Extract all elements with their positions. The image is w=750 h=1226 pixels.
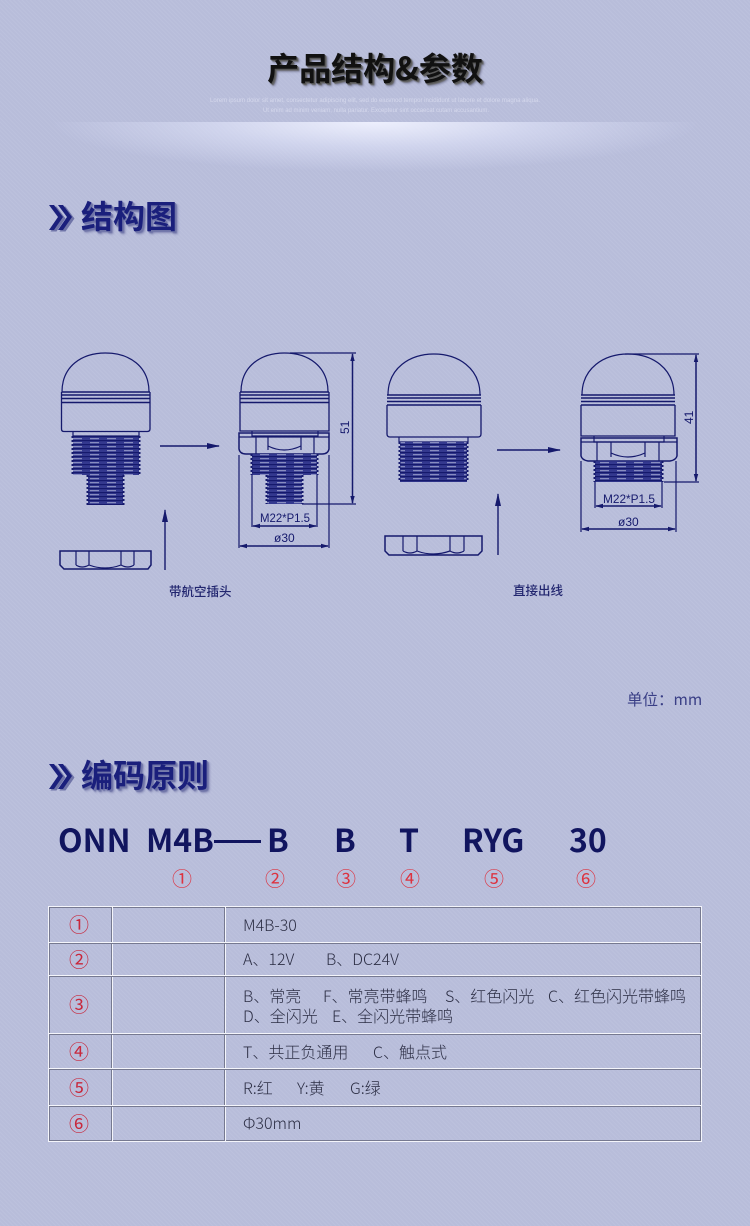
row 1 xyxy=(69,909,297,938)
model code line: B xyxy=(267,816,289,862)
dimension labels: ø30 xyxy=(274,531,295,545)
row 2: A、12V xyxy=(243,946,294,970)
model code line: ④ xyxy=(400,863,420,892)
model code line: ① xyxy=(172,863,192,892)
row 3: F、常亮带蜂鸣 xyxy=(323,983,428,1007)
row 4: ④ xyxy=(69,1036,89,1065)
icon: double chevron xyxy=(49,205,74,232)
row 4: C、触点式 xyxy=(373,1039,447,1063)
heading text: 编码原则 xyxy=(81,751,209,797)
row 4 xyxy=(69,1036,447,1065)
caption: aviation plug: 带航空插头 xyxy=(169,581,232,600)
row 5: R:红 xyxy=(243,1075,273,1099)
model code line: ⑥ xyxy=(576,863,596,892)
dimension labels: M22*P1.5 xyxy=(603,492,655,506)
subtitle placeholder text: Ut enim ad minim veniam, nulla pariatur. Excepteur sint occaecat cutam accusantium. xyxy=(263,107,489,114)
unit note: 单位：mm xyxy=(627,688,702,710)
row 5 xyxy=(69,1072,381,1101)
section heading: coding rules xyxy=(49,751,211,797)
drawing: assembled lamp with direct wiring, dimensions xyxy=(581,354,699,532)
coding table xyxy=(48,906,702,1142)
row 3: C、红色闪光带蜂鸣 xyxy=(548,983,686,1007)
row 2: ② xyxy=(69,944,89,973)
row 6: Φ30mm xyxy=(243,1110,301,1134)
model code line: ONN xyxy=(58,816,131,862)
subtitle placeholder text xyxy=(210,97,540,114)
dimension labels: ø30 xyxy=(618,515,639,529)
row 5: Y:黄 xyxy=(297,1075,325,1099)
model code line: ② xyxy=(265,863,285,892)
row 6: ⑥ xyxy=(69,1108,89,1137)
model code line: RYG xyxy=(462,816,524,862)
row 3: S、红色闪光 xyxy=(445,983,534,1007)
row 5: ⑤ xyxy=(69,1072,89,1101)
row 3: E、全闪光带蜂鸣 xyxy=(332,1003,453,1027)
model code line: ⑤ xyxy=(484,863,504,892)
model code line: B xyxy=(334,816,356,862)
model code line xyxy=(58,816,607,892)
icon: double chevron xyxy=(49,764,74,790)
row 2 xyxy=(69,944,399,973)
caption: direct wiring: 直接出线 xyxy=(513,580,563,599)
row 1: M4B-30 xyxy=(243,912,297,936)
row 2: B、DC24V xyxy=(326,946,399,970)
model code line: ③ xyxy=(336,863,356,892)
heading text: 结构图 xyxy=(81,192,177,238)
drawing: lamp with direct wiring xyxy=(385,354,482,555)
section heading: structure diagram xyxy=(49,192,179,238)
row 1: ① xyxy=(69,909,89,938)
row 3: ③ xyxy=(69,989,89,1018)
drawing: lamp with aviation plug xyxy=(60,353,151,569)
arrows: direct wiring assembly xyxy=(497,450,560,555)
row 3: D、全闪光 xyxy=(243,1003,318,1027)
row 3 xyxy=(69,983,686,1027)
arrows: aviation plug assembly xyxy=(160,446,219,570)
model code line: M4B xyxy=(146,816,214,862)
model code line: T xyxy=(399,816,419,862)
row 4: T、共正负通用 xyxy=(243,1039,348,1063)
row 3: B、常亮 xyxy=(243,983,301,1007)
dimension labels: 41 xyxy=(682,410,696,424)
row 6 xyxy=(69,1108,301,1137)
dimension labels xyxy=(260,410,696,545)
title: 产品结构&参数 xyxy=(267,44,483,90)
dimension labels: M22*P1.5 xyxy=(260,511,310,525)
header glow band xyxy=(50,122,700,172)
row dividers xyxy=(49,942,701,943)
column dividers xyxy=(111,907,112,1141)
model code line: 30 xyxy=(569,816,607,862)
drawing: assembled lamp with aviation plug, dimensions xyxy=(239,353,356,548)
dimension labels: 51 xyxy=(338,420,352,434)
row 5: G:绿 xyxy=(350,1075,381,1099)
